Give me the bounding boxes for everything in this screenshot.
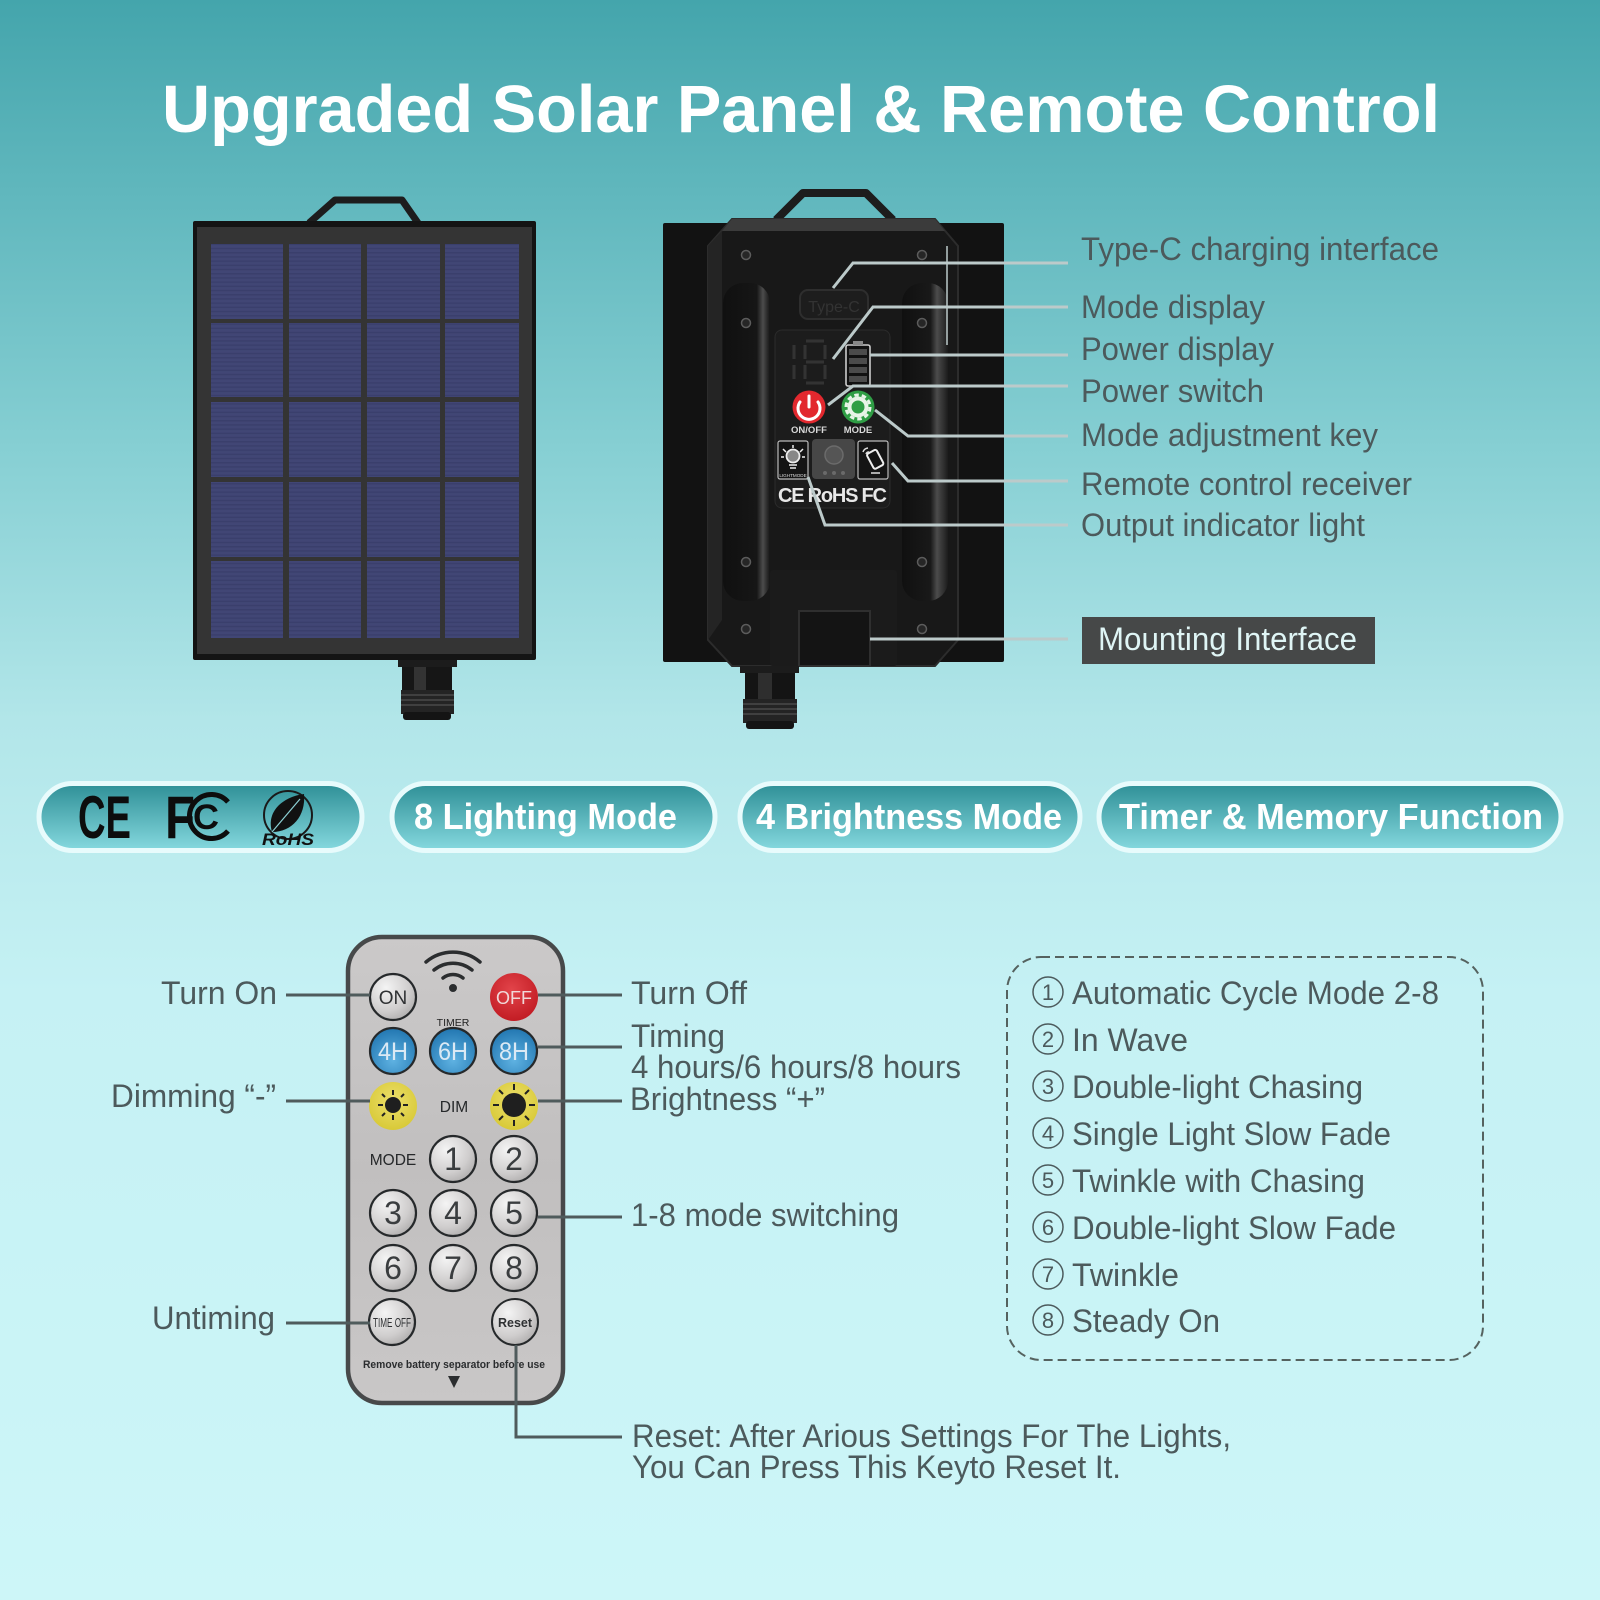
battery separator note: Remove battery separator before use	[363, 1359, 545, 1371]
remote labels: Turn Off	[631, 975, 747, 1011]
mode 7: 7	[1042, 1262, 1054, 1287]
mode 1: 1	[1042, 980, 1054, 1005]
controller connector	[740, 666, 799, 729]
certification marks on device: CE RoHS FC	[778, 485, 888, 507]
remote receive icon	[858, 441, 888, 479]
button 8	[491, 1245, 537, 1291]
OFF button: OFF	[496, 988, 532, 1008]
pill: 4 brightness mode	[740, 784, 1080, 850]
power button	[792, 390, 826, 424]
pill: 8 lighting mode: 8 Lighting Mode	[414, 796, 677, 837]
FCC mark	[165, 784, 228, 851]
button 8: 8	[505, 1250, 523, 1286]
8H button: 8H	[499, 1038, 529, 1066]
mode 6: 6	[1042, 1215, 1054, 1240]
time off button: TIME OFF	[373, 1316, 411, 1330]
panel: lighting mode list	[1007, 957, 1483, 1360]
mounting interface tag: Mounting Interface	[1098, 621, 1357, 657]
button 3: 3	[384, 1195, 402, 1231]
controller labels: Output indicator light	[1081, 507, 1365, 543]
solar cell grid	[211, 244, 519, 638]
mode 6: Double-light Slow Fade	[1072, 1210, 1396, 1246]
time off button	[369, 1299, 415, 1345]
controller labels: Remote control receiver	[1081, 466, 1412, 502]
mode 8: Steady On	[1072, 1303, 1220, 1339]
button 3	[370, 1190, 416, 1236]
reset button: Reset	[498, 1316, 533, 1330]
solar panel front	[193, 200, 536, 720]
panel hanging handle	[309, 200, 418, 223]
remote labels: Dimming “-”	[111, 1078, 276, 1114]
receiver window	[812, 439, 855, 479]
lighting icon	[778, 441, 808, 479]
remote labels: You Can Press This Keyto Reset It.	[632, 1449, 1121, 1485]
control label panel	[775, 330, 890, 508]
wifi signal icon	[426, 952, 480, 992]
FCC mark: C	[193, 798, 219, 837]
controller labels: Mode display	[1081, 289, 1265, 325]
dashed list border	[1007, 957, 1483, 1360]
controller back view	[663, 193, 1004, 729]
remote labels: Untiming	[152, 1300, 275, 1336]
separator arrow	[448, 1376, 460, 1388]
USB-C port cover	[800, 290, 868, 319]
mode 3: Double-light Chasing	[1072, 1069, 1363, 1105]
mode button	[842, 390, 874, 424]
ON button: ON	[379, 988, 407, 1009]
6H button	[430, 1028, 476, 1074]
mode 2: In Wave	[1072, 1022, 1188, 1058]
8H button	[491, 1028, 537, 1074]
USB-C port cover: Type-C	[808, 299, 860, 316]
mode 3: 3	[1042, 1074, 1054, 1099]
remote labels: Reset: After Arious Settings For The Lights,	[632, 1418, 1231, 1454]
4H button: 4H	[378, 1038, 408, 1066]
remote labels	[111, 975, 1231, 1485]
button 1: 1	[444, 1141, 462, 1177]
mode 5: 5	[1042, 1168, 1054, 1193]
controller labels: Type-C charging interface	[1081, 231, 1439, 267]
mode 8: 8	[1042, 1308, 1054, 1333]
mounting interface tag	[1082, 617, 1375, 664]
button 7	[430, 1245, 476, 1291]
remote callout lines	[286, 995, 622, 1437]
back plate	[663, 223, 1004, 662]
button 6: 6	[384, 1250, 402, 1286]
button 7: 7	[444, 1250, 462, 1286]
4H button	[370, 1028, 416, 1074]
panel frame	[193, 221, 536, 660]
side grips	[723, 283, 770, 601]
button 4: 4	[444, 1195, 462, 1231]
mode 4: Single Light Slow Fade	[1072, 1116, 1391, 1152]
button 5: 5	[505, 1195, 523, 1231]
controller labels: Mode adjustment key	[1081, 417, 1378, 453]
battery display	[846, 341, 870, 386]
controller handle	[776, 193, 893, 220]
MODE caption: MODE	[370, 1152, 416, 1169]
panel connector	[398, 660, 457, 720]
mode 4: 4	[1042, 1121, 1054, 1146]
seven segment display	[794, 341, 825, 383]
pill: 4 brightness mode: 4 Brightness Mode	[756, 796, 1062, 837]
button captions: ON/OFF	[791, 425, 827, 436]
remote labels: Turn On	[161, 975, 277, 1011]
pill: certifications	[39, 784, 362, 851]
remote labels: 1-8 mode switching	[631, 1197, 899, 1233]
pill: 8 lighting mode	[392, 784, 715, 850]
DIM caption: DIM	[440, 1099, 468, 1116]
reset button	[492, 1299, 538, 1345]
dim minus button	[369, 1082, 417, 1130]
pill: timer and memory	[1099, 784, 1561, 850]
button captions: MODE	[844, 425, 872, 436]
remote labels: Brightness “+”	[630, 1081, 825, 1117]
pill: certifications: CE	[78, 784, 131, 851]
pill: timer and memory: Timer & Memory Function	[1119, 796, 1543, 837]
controller body	[708, 219, 958, 666]
controller callout lines	[808, 246, 1068, 639]
remote labels: Timing	[631, 1018, 725, 1054]
dim plus button	[490, 1082, 538, 1130]
button 4	[430, 1190, 476, 1236]
title: Upgraded Solar Panel & Remote Control	[162, 72, 1440, 147]
button 2	[491, 1136, 537, 1182]
mounting block	[770, 570, 897, 666]
button 1	[430, 1136, 476, 1182]
controller labels: Power display	[1081, 331, 1274, 367]
mode 2: 2	[1042, 1027, 1054, 1052]
button captions	[791, 425, 872, 436]
button 6	[370, 1245, 416, 1291]
button 2: 2	[505, 1141, 523, 1177]
screws	[742, 250, 926, 634]
OFF button	[490, 973, 538, 1021]
ON button	[370, 974, 416, 1020]
lighting icon: LIGHTMODE	[779, 473, 807, 478]
remote body	[348, 937, 563, 1403]
FCC mark: F	[165, 784, 195, 851]
RoHS leaf mark: RoHS	[262, 830, 315, 849]
button 5	[491, 1190, 537, 1236]
6H button: 6H	[438, 1038, 468, 1066]
remote control	[348, 937, 563, 1403]
mode 5: Twinkle with Chasing	[1072, 1163, 1365, 1199]
timer caption: TIMER	[437, 1017, 470, 1029]
RoHS leaf mark	[262, 791, 315, 849]
mode 1: Automatic Cycle Mode 2-8	[1072, 975, 1439, 1011]
controller labels	[1081, 231, 1439, 543]
remote labels: 4 hours/6 hours/8 hours	[631, 1049, 961, 1085]
controller labels: Power switch	[1081, 373, 1264, 409]
mode 7: Twinkle	[1072, 1257, 1179, 1293]
